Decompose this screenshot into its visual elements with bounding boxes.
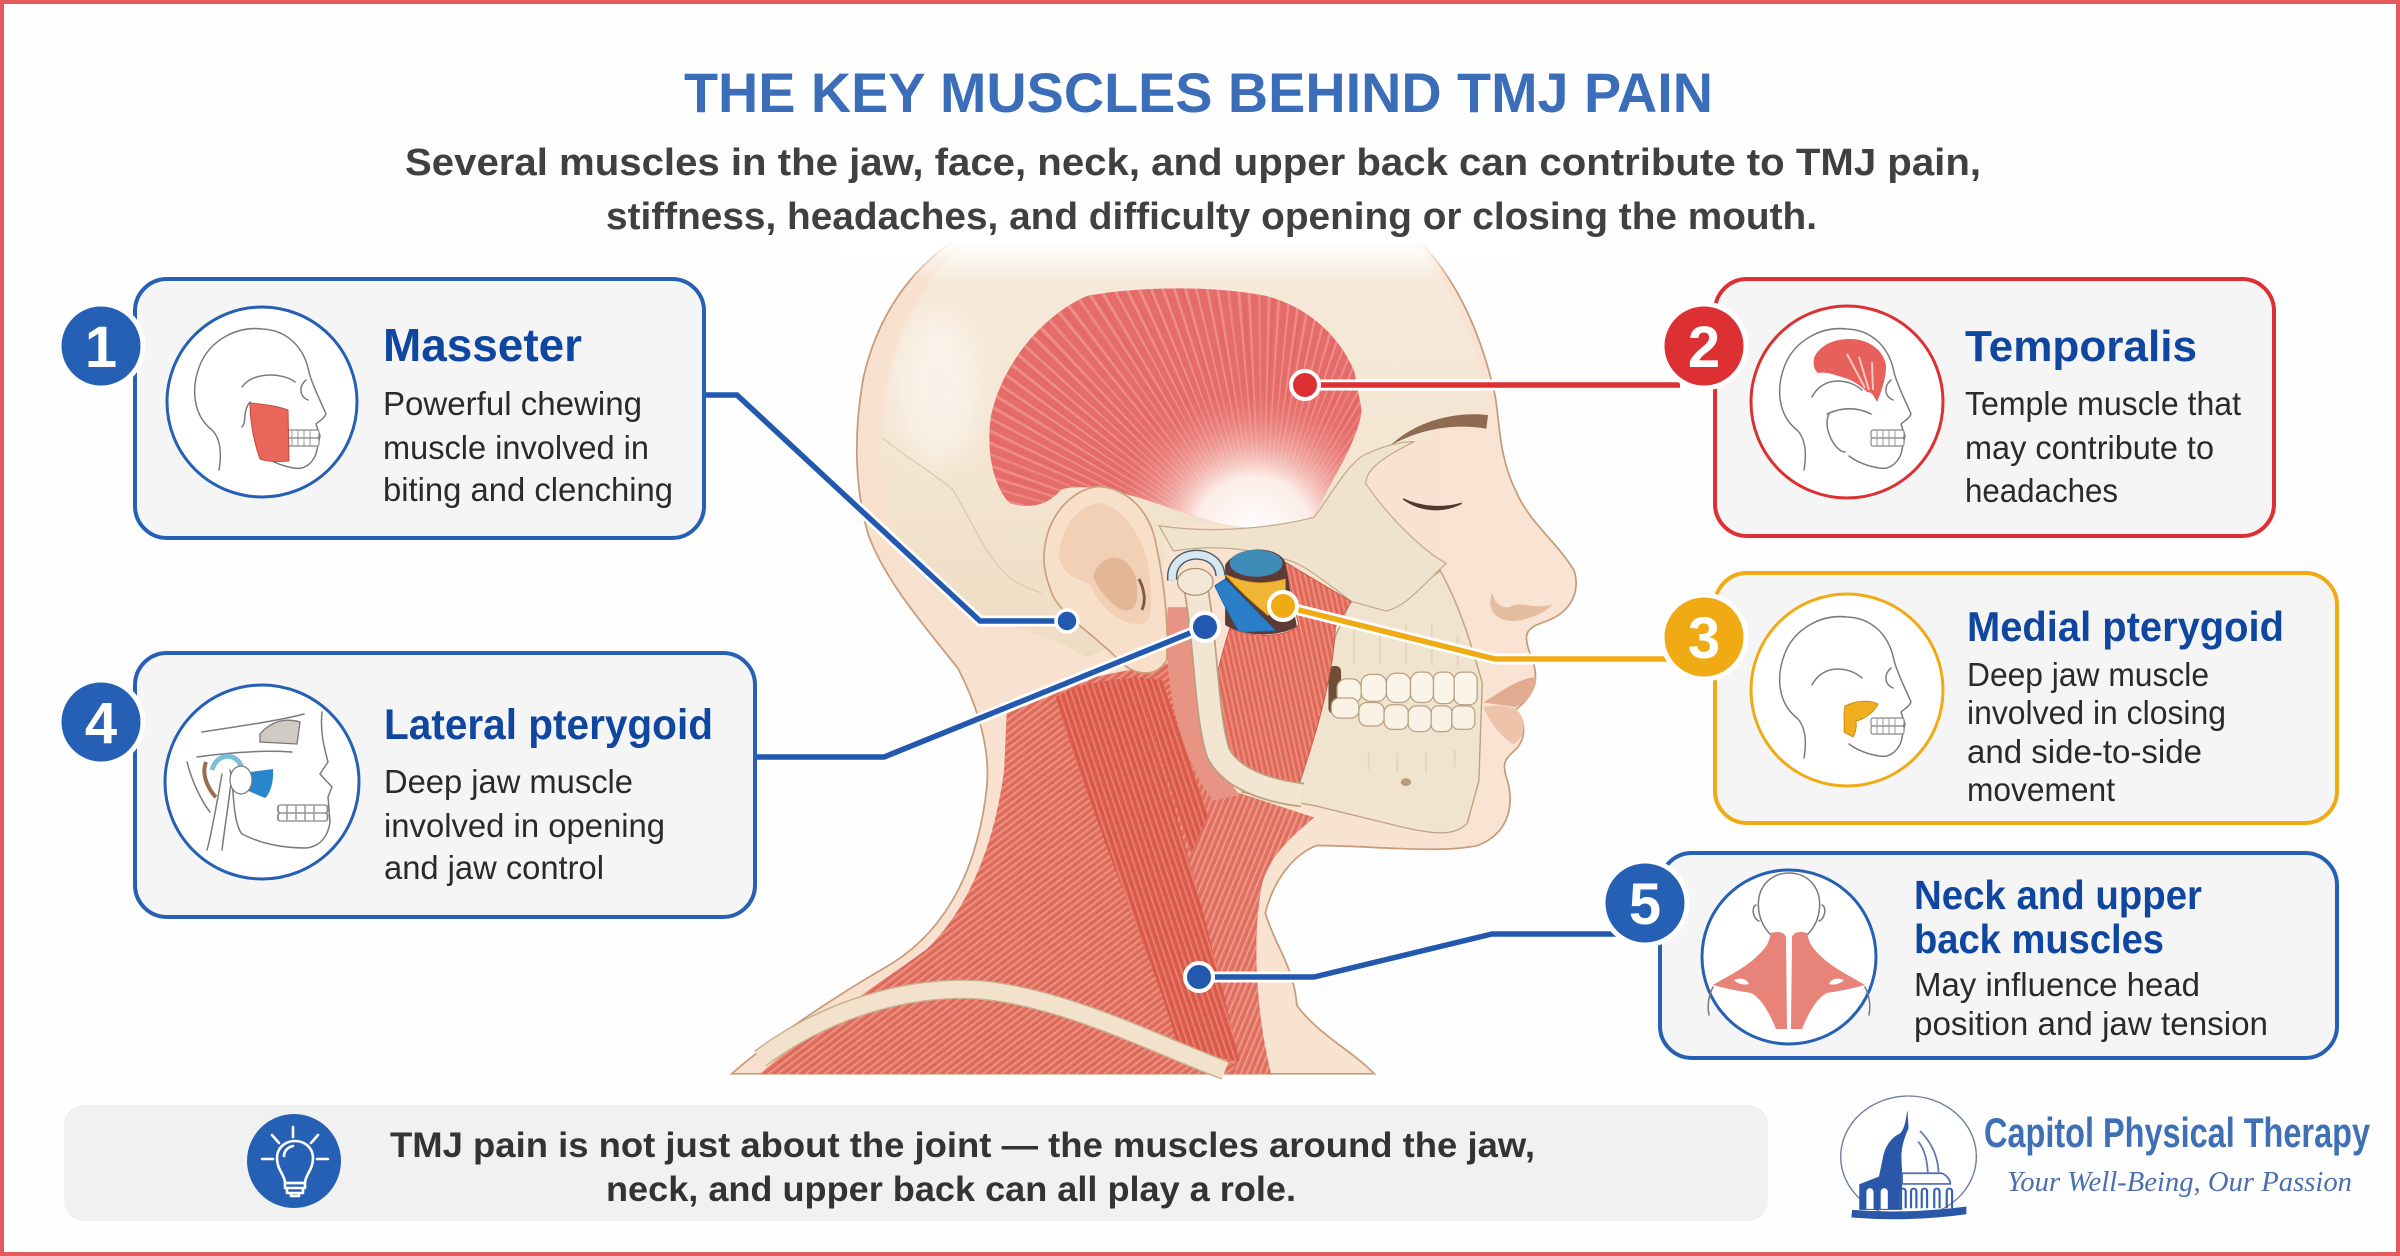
takeaway text: TMJ pain is not just about the joint — the muscles around the jaw,: [390, 1126, 1535, 1165]
connector: neck and upper back: [1185, 934, 1620, 991]
mandible ramus: [1195, 585, 1303, 795]
description: Masseter: Powerful chewing: [383, 385, 642, 422]
title: THE KEY MUSCLES BEHIND TMJ PAIN: [684, 62, 1713, 124]
top fade: [835, 220, 1524, 282]
tooth roots: [1354, 624, 1458, 773]
subtitle: stiffness, headaches, and difficulty opening or closing the mouth.: [606, 196, 1817, 238]
heading: Temporalis: Temporalis: [1965, 322, 2197, 371]
mental foramen: [1401, 778, 1411, 786]
takeaway text: neck, and upper back can all play a role.: [606, 1170, 1296, 1209]
icon: medial pterygoid skull: [1751, 594, 1943, 786]
cranium bone: [881, 242, 1488, 658]
eyebrow: [1390, 414, 1488, 446]
connector: lateral pterygoid: [754, 613, 1219, 757]
neck muscle mass: [760, 663, 1314, 1074]
upper and lower jaw bone: [1219, 571, 1482, 833]
front neck muscles: [1156, 759, 1314, 1074]
muscle behind the jaw: [1167, 607, 1239, 801]
panel: temporalis: [1662, 279, 2274, 536]
badge 4: [59, 680, 143, 764]
description: Medial pterygoid: movement: [1967, 771, 2115, 808]
heading: Medial pterygoid: Medial pterygoid: [1967, 603, 2284, 650]
badge 2: [1662, 304, 1746, 388]
lateral pterygoid blue band: [1215, 579, 1276, 632]
badge 5: 5: [1629, 872, 1661, 937]
description: Masseter: biting and clenching: [383, 471, 673, 508]
medial pterygoid yellow band: [1225, 575, 1285, 616]
description: Lateral pterygoid: and jaw control: [384, 849, 604, 886]
cranium highlight: [898, 315, 978, 461]
description: Medial pterygoid: involved in closing: [1967, 694, 2226, 731]
heading: Lateral pterygoid: Lateral pterygoid: [384, 701, 713, 749]
icon: temporalis skull: [1751, 306, 1943, 498]
subtitle: Several muscles in the jaw, face, neck, and upper back can contribute to TMJ pain,: [405, 142, 1981, 184]
inner ear: [1059, 503, 1151, 624]
connector: masseter: [704, 395, 1078, 632]
description: Temporalis: Temple muscle that: [1965, 385, 2241, 422]
heading: Masseter: Masseter: [383, 319, 582, 371]
description: Neck and upper back: May influence head: [1914, 966, 2200, 1003]
description: Temporalis: headaches: [1965, 472, 2118, 509]
description: Temporalis: may contribute to: [1965, 429, 2214, 466]
heading: Neck and upper back muscles: [1914, 872, 2202, 962]
subtitle: [405, 142, 1981, 238]
icon: masseter head: [167, 307, 357, 497]
panel: lateral pterygoid: [59, 653, 755, 917]
articular disc: [1172, 555, 1221, 580]
heading: Neck and upper back muscles: back muscles: [1914, 916, 2164, 962]
ear: [1044, 486, 1167, 673]
badge 1: 1: [85, 315, 117, 380]
TMJ cavity: [1225, 549, 1297, 634]
lips: [1483, 677, 1536, 707]
sternocleidomastoid muscle: [1056, 677, 1239, 1062]
description: Lateral pterygoid: [384, 763, 665, 886]
gap behind teeth: [1328, 666, 1341, 714]
connector: temporalis: [1291, 371, 1680, 399]
zygomatic arch and cheekbone: [1159, 442, 1446, 611]
description: Medial pterygoid: [1967, 656, 2226, 808]
lower teeth: [1331, 698, 1475, 732]
upper teeth: [1337, 672, 1477, 705]
masseter muscle: [1212, 562, 1351, 791]
logo: Capitol Physical Therapy: [1841, 1096, 2370, 1219]
icon: light bulb: [247, 1114, 341, 1208]
description: Lateral pterygoid: involved in opening: [384, 807, 665, 844]
panel: medial pterygoid: [1662, 573, 2337, 823]
closed eye: [1403, 499, 1462, 510]
description: Lateral pterygoid: Deep jaw muscle: [384, 763, 633, 800]
icon: lateral pterygoid skull: [165, 685, 359, 879]
shoulder muscle and clavicle: [760, 1003, 1156, 1074]
nostril and nose wing: [1490, 593, 1552, 621]
heading: Neck and upper back muscles: Neck and upper: [1914, 872, 2202, 918]
badge 4: 4: [85, 691, 117, 756]
connector: medial pterygoid: [1269, 592, 1690, 659]
panel: masseter: [59, 279, 704, 538]
badge 3: [1662, 595, 1746, 679]
description: Masseter: [383, 385, 673, 508]
callout: key takeaway bar: [64, 1105, 1768, 1221]
description: Medial pterygoid: Deep jaw muscle: [1967, 656, 2209, 693]
description: Neck and upper back: position and jaw tension: [1914, 1005, 2268, 1042]
skull suture: [882, 438, 1041, 593]
badge 5: [1603, 861, 1687, 945]
icon: capitol dome: [1841, 1096, 1976, 1219]
head and neck silhouette: [731, 240, 1576, 1074]
panel: neck and upper back: [1603, 853, 2337, 1058]
badge 2: 2: [1688, 315, 1720, 380]
TMJ blue upper muscle: [1230, 550, 1283, 577]
description: Medial pterygoid: and side-to-side: [1967, 733, 2202, 770]
badge 1: [59, 304, 143, 388]
takeaway text: [390, 1126, 1535, 1209]
description: Temporalis: [1965, 385, 2241, 509]
anatomical head illustration: [731, 220, 1576, 1074]
description: Neck and upper back: [1914, 966, 2268, 1042]
description: Masseter: muscle involved in: [383, 429, 649, 466]
icon: back view of neck muscles: [1702, 870, 1876, 1044]
tagline: Your Well-Being, Our Passion: [2007, 1166, 2352, 1198]
badge 3: 3: [1688, 606, 1720, 671]
secondary neck band: [1136, 677, 1208, 854]
temporalis muscle: [989, 288, 1362, 528]
mandibular condyle: [1177, 568, 1213, 595]
